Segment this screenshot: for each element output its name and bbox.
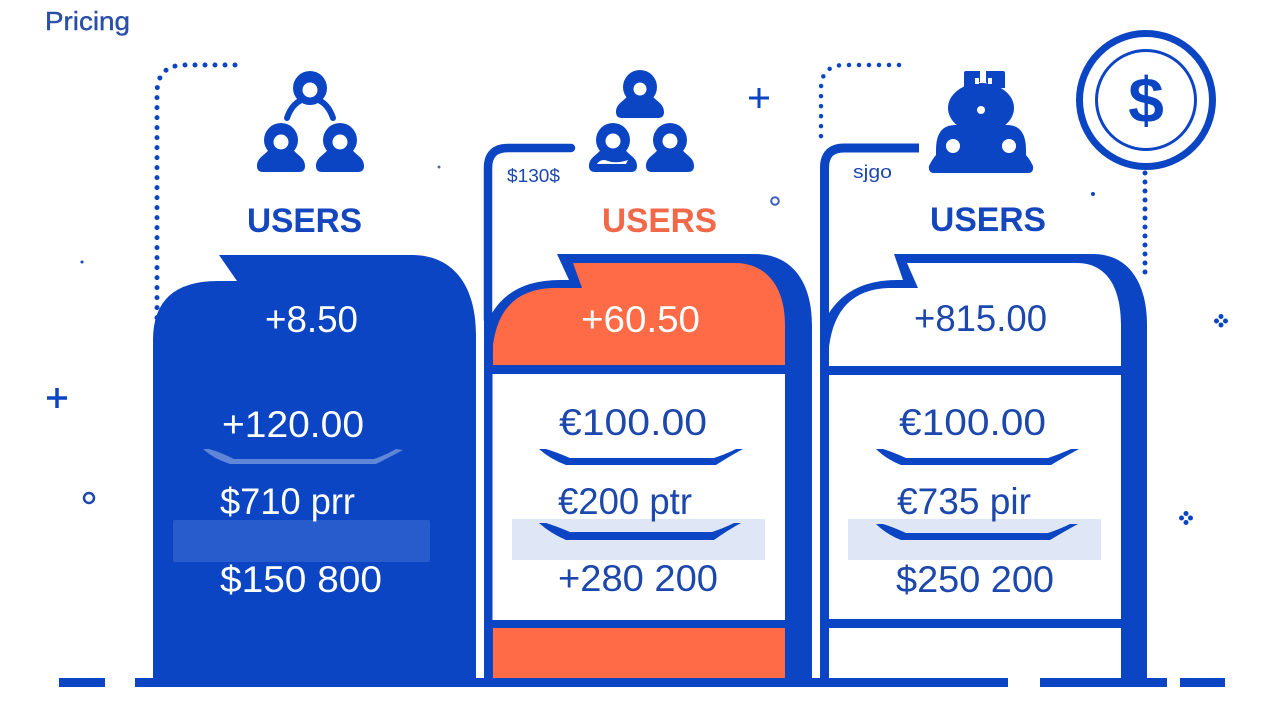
plan three price: +815.00	[914, 298, 1047, 339]
icon: users group two	[589, 70, 694, 172]
heading: plan three users: USERS	[930, 201, 1046, 239]
plan two body	[492, 374, 785, 620]
icon: users group three	[929, 71, 1033, 173]
plan one card	[153, 255, 476, 678]
icon: dollar coin	[1080, 34, 1212, 166]
plan two bracket	[488, 148, 571, 320]
plan two highlight band	[512, 519, 765, 560]
dotted connector: coin	[1142, 173, 1148, 279]
plan three footer	[829, 628, 1121, 678]
plan one divider	[203, 449, 403, 464]
plan three highlight band	[848, 519, 1101, 560]
plan two price: +60.50	[581, 299, 700, 340]
icon: plus top	[749, 88, 769, 108]
heading: plan two users: USERS	[602, 202, 717, 240]
plan three body	[829, 375, 1121, 619]
plan three bracket	[824, 148, 919, 320]
baseline rule	[59, 678, 1225, 687]
panel: plan one	[153, 255, 476, 678]
icon: ring left	[84, 493, 94, 503]
plan one highlight band	[173, 520, 430, 562]
plan three frame	[820, 254, 1147, 678]
plan three divider 1	[876, 449, 1079, 465]
plan two small label: $130$	[507, 166, 560, 186]
icon: sparkle lower right	[1179, 511, 1193, 525]
icon: ring centre	[771, 197, 779, 205]
plan one price row 1: +120.00	[222, 404, 364, 445]
title: Pricing	[45, 6, 130, 36]
plan two divider 2	[539, 523, 741, 540]
dotted connector: left	[157, 65, 235, 318]
plan one price row 3: $150 800	[220, 559, 382, 600]
icon: plus left	[47, 388, 67, 408]
icon: dollar coin: $	[1128, 64, 1164, 136]
plan two divider 1	[539, 449, 743, 465]
dotted connector: right	[821, 65, 899, 137]
plan three price row 3: $250 200	[896, 559, 1054, 600]
decorative dots	[80, 166, 1095, 264]
plan three price row 1: €100.00	[899, 402, 1046, 443]
plan two price row 1: €100.00	[559, 402, 707, 443]
plan two price row 2: €200 ptr	[558, 481, 692, 522]
plan three divider 2	[876, 524, 1078, 540]
panel: plan two	[484, 148, 812, 678]
heading: plan one users: USERS	[247, 202, 362, 240]
plan three small label: sjgo	[853, 162, 892, 182]
plan two frame	[484, 254, 812, 678]
plan two orange footer	[493, 628, 785, 678]
panel: plan three	[820, 148, 1147, 678]
plan two price row 3: +280 200	[558, 558, 718, 599]
plan one price row 2: $710 prr	[220, 481, 355, 522]
plan two orange header	[493, 263, 785, 365]
plan one price: +8.50	[265, 299, 358, 340]
plan three price row 2: €735 pir	[897, 481, 1031, 522]
plan three header	[829, 263, 1121, 366]
icon: sparkle top right	[1214, 314, 1228, 328]
icon: users group one	[257, 71, 364, 172]
